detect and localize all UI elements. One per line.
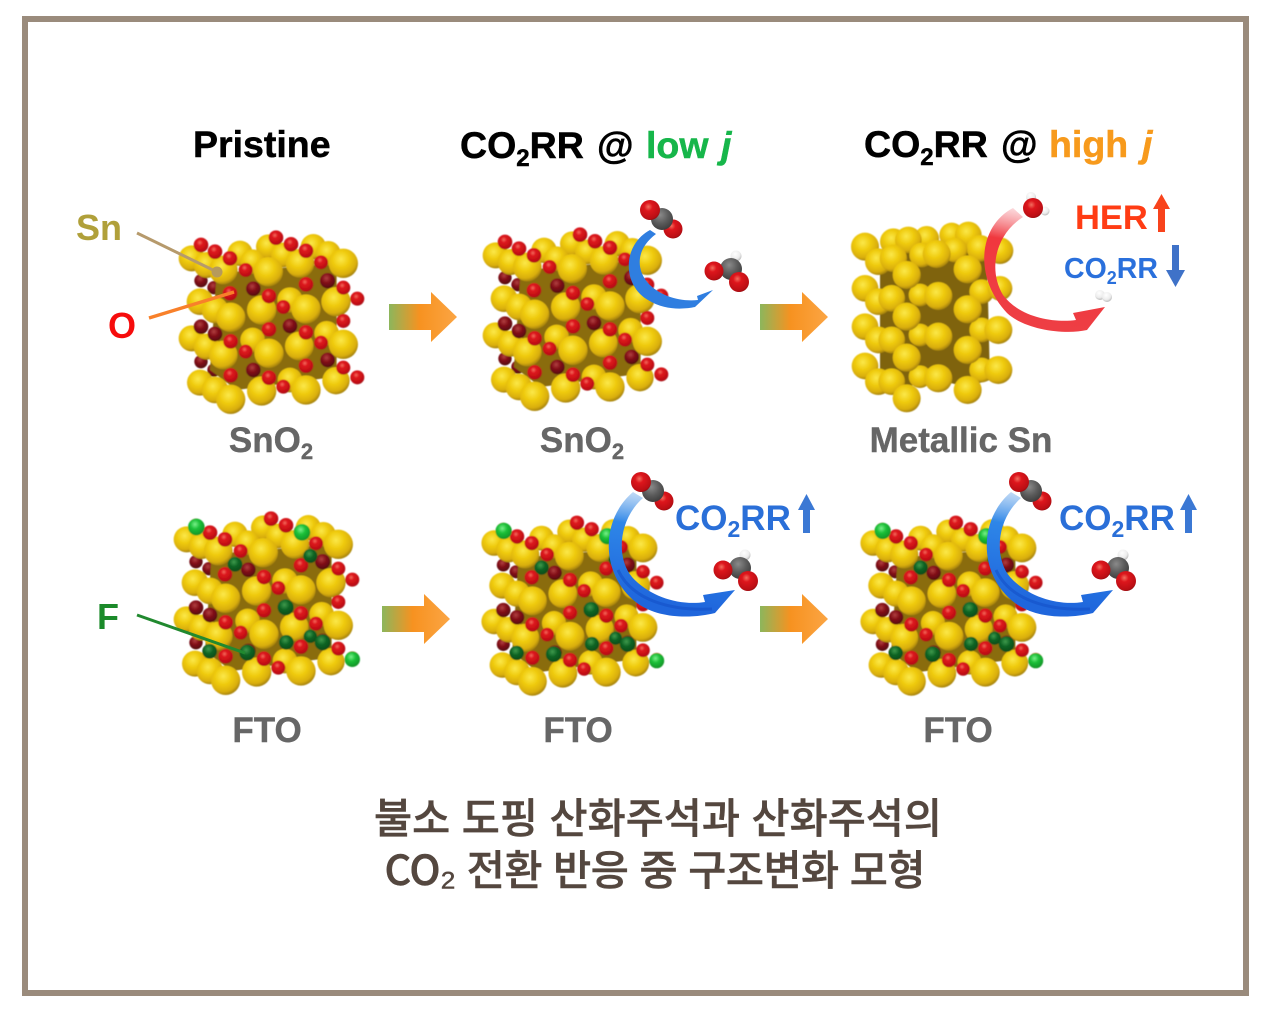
Korean caption line 1: 불소 도핑 산화주석과 산화주석의 [374,785,942,845]
small blue reaction arrow [629,230,713,309]
CO2RR up label: 2 [728,516,740,542]
CO2RR up label [675,494,815,542]
blue reaction arrow [987,492,1113,617]
pristine SnO2 crystal [179,230,364,414]
row 1 column 2 heading: CO [460,124,516,166]
red reaction arrow [984,208,1105,332]
SnO2 caption: 2 [301,439,313,464]
row 1 column 3 heading: 2 [920,144,934,171]
hydrogen molecule [1095,290,1112,302]
SnO2 caption: SnO [229,421,301,460]
arrow: FTO pristine to low j [382,594,450,644]
CO2RR up label: 2 [1112,516,1124,542]
row 1 column 2 heading: j [716,124,733,166]
SnO2 caption: 2 [612,439,624,464]
FTO crystal pristine [174,511,360,695]
CO2RR up label: CO [675,499,728,538]
row 1 column 2 heading: RR [530,124,584,166]
row 1 column 2 heading: @ [597,124,634,166]
CO2 molecule [640,200,682,238]
FTO crystal high j [860,516,1043,696]
Metallic Sn caption: Metallic Sn [870,421,1052,460]
FTO crystal low j [481,516,664,696]
CO2 molecule [1009,472,1052,510]
row 1 column 2 heading: 2 [516,145,530,172]
Sn label and pointer: Sn [76,207,122,248]
HER up label [1075,194,1170,237]
arrow: FTO low j to high j [760,594,828,644]
arrow: pristine to low j [389,292,457,342]
formate molecule [704,250,749,292]
CO2RR down label: 2 [1107,268,1117,288]
CO2RR up label: CO [1059,499,1112,538]
formate molecule [714,550,758,591]
row 1 column 3 heading: @ [1001,123,1038,165]
row 1 column 1 heading: Pristine [193,123,331,165]
FTO caption: FTO [543,711,613,750]
row 1 column 3 heading: CO [864,123,920,165]
CO2RR down label: RR [1117,253,1158,285]
FTO caption: FTO [923,711,993,750]
water molecule [1023,192,1050,218]
Sn label and pointer [76,207,222,278]
formate molecule [1092,550,1136,591]
arrow: low j to high j [760,292,828,342]
CO2RR up label: RR [740,499,791,538]
row 1 column 3 heading: RR [934,123,988,165]
blue reaction arrow [609,492,735,617]
row 1 column 3 heading: j [1137,123,1154,165]
row 1 column 2 heading: low [646,124,709,166]
CO2RR up label [1059,494,1197,542]
SnO2 caption: SnO [540,421,612,460]
HER up label: HER [1075,199,1148,237]
CO2 molecule [631,472,674,510]
CO2RR down label [1064,245,1185,288]
F label and pointer: F [97,596,119,637]
row 1 column 3 heading: high [1049,123,1128,165]
O label and pointer: O [108,305,136,346]
metallic Sn crystal [851,222,1013,412]
FTO caption: FTO [232,711,302,750]
CO2RR down label: CO [1064,253,1107,285]
CO2RR up label: RR [1124,499,1175,538]
O label and pointer [108,292,234,346]
Korean caption line 2: CO₂ 전환 반응 중 구조변화 모형 [384,837,926,897]
F label and pointer [97,596,245,653]
low j SnO2 crystal [483,227,668,411]
